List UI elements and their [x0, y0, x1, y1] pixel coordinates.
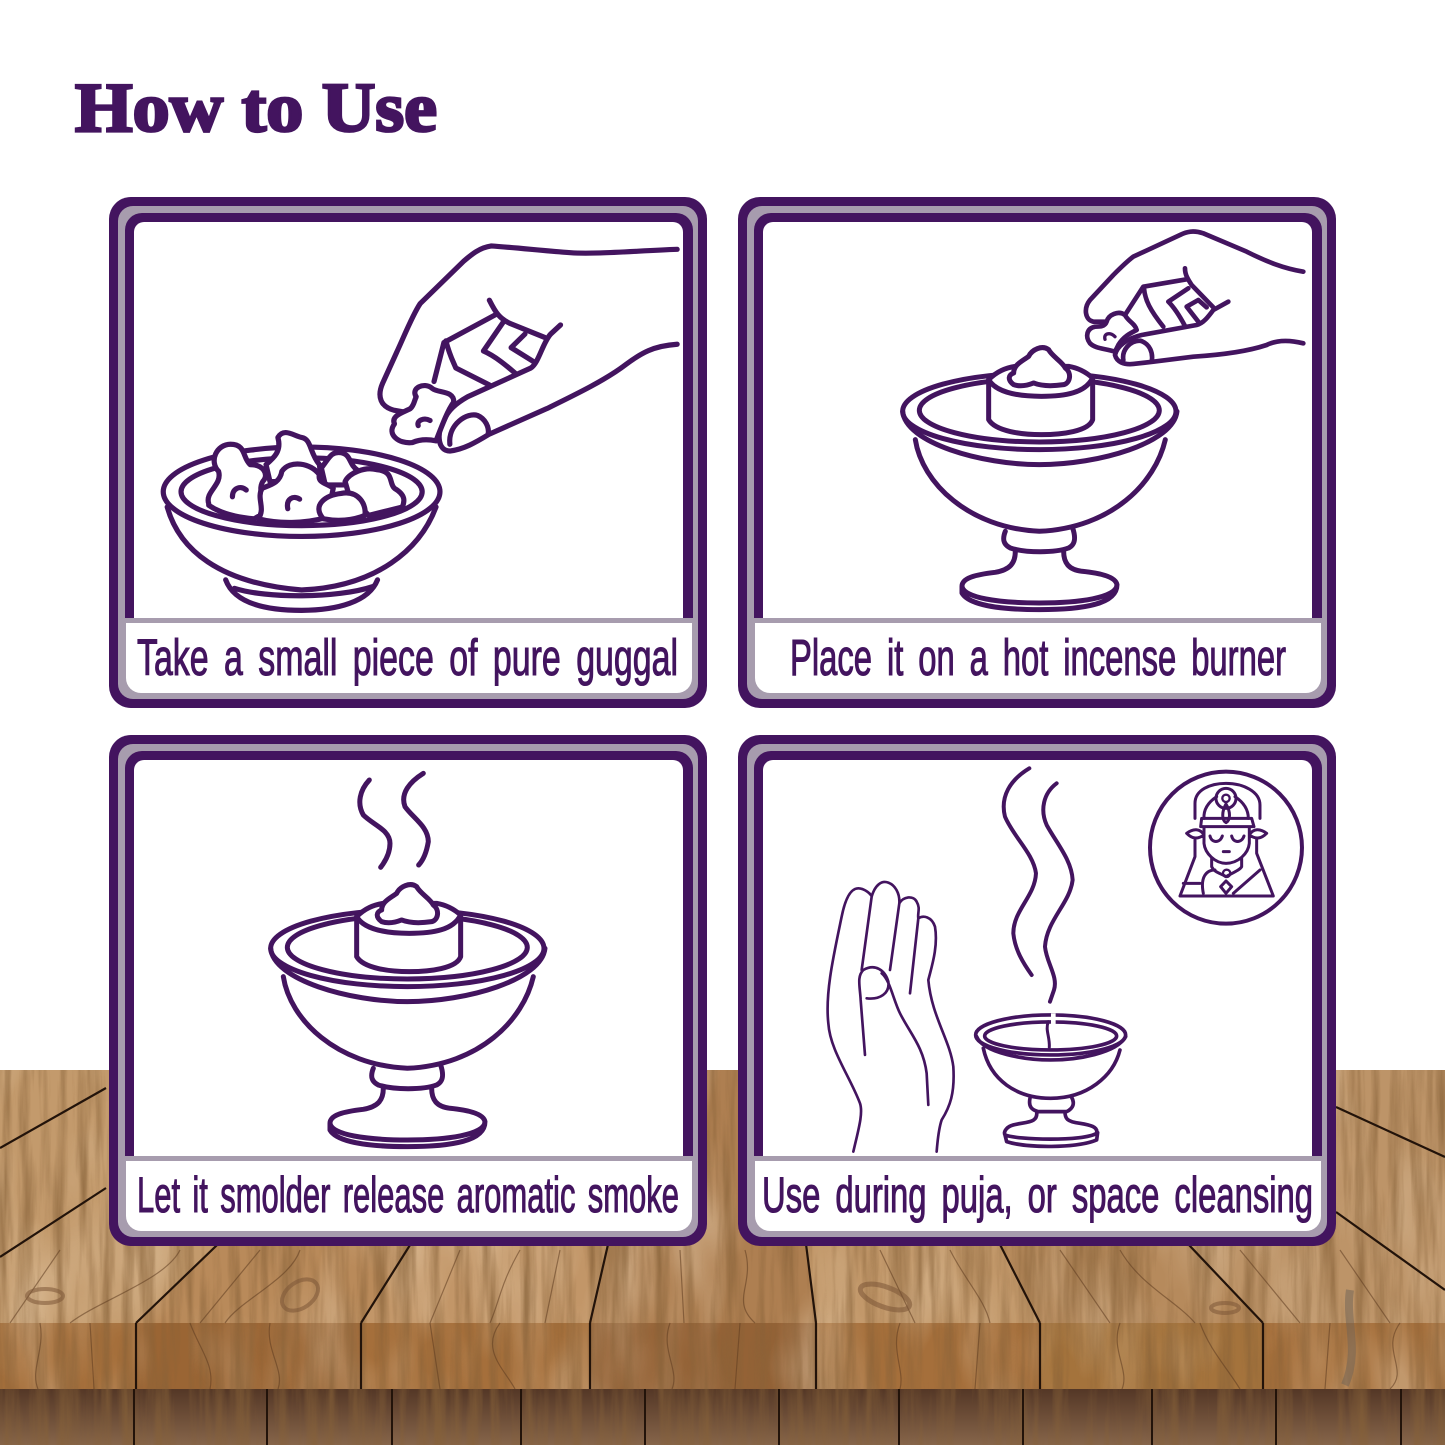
- icon: hand with guggal: [1086, 232, 1303, 364]
- panel frame: [109, 735, 707, 1246]
- illustration: smoking burner: [271, 773, 545, 1147]
- panel: step 4 use during puja: [738, 735, 1336, 1246]
- illustration: praying hand: [828, 882, 954, 1152]
- wooden table background: [0, 1070, 1445, 1445]
- panel: step 2 place on burner: [738, 197, 1336, 708]
- illustration: small burner with smoke: [976, 768, 1126, 1146]
- panel frame: [738, 197, 1336, 708]
- title: How to Use: [75, 70, 437, 147]
- caption: Take a small piece of pure guggal: [137, 629, 678, 686]
- caption: Let it smolder release aromatic smoke: [137, 1167, 679, 1223]
- panel frame: [738, 735, 1336, 1246]
- panel: step 3 let it smolder: [109, 735, 707, 1246]
- panel frame: [109, 197, 707, 708]
- illustration: hand taking guggal over a bowl: [163, 246, 677, 610]
- panel: step 1 take guggal: [109, 197, 707, 708]
- illustration: hand dropping guggal on burner: [903, 348, 1177, 610]
- icon: deity in circle: [1150, 772, 1302, 924]
